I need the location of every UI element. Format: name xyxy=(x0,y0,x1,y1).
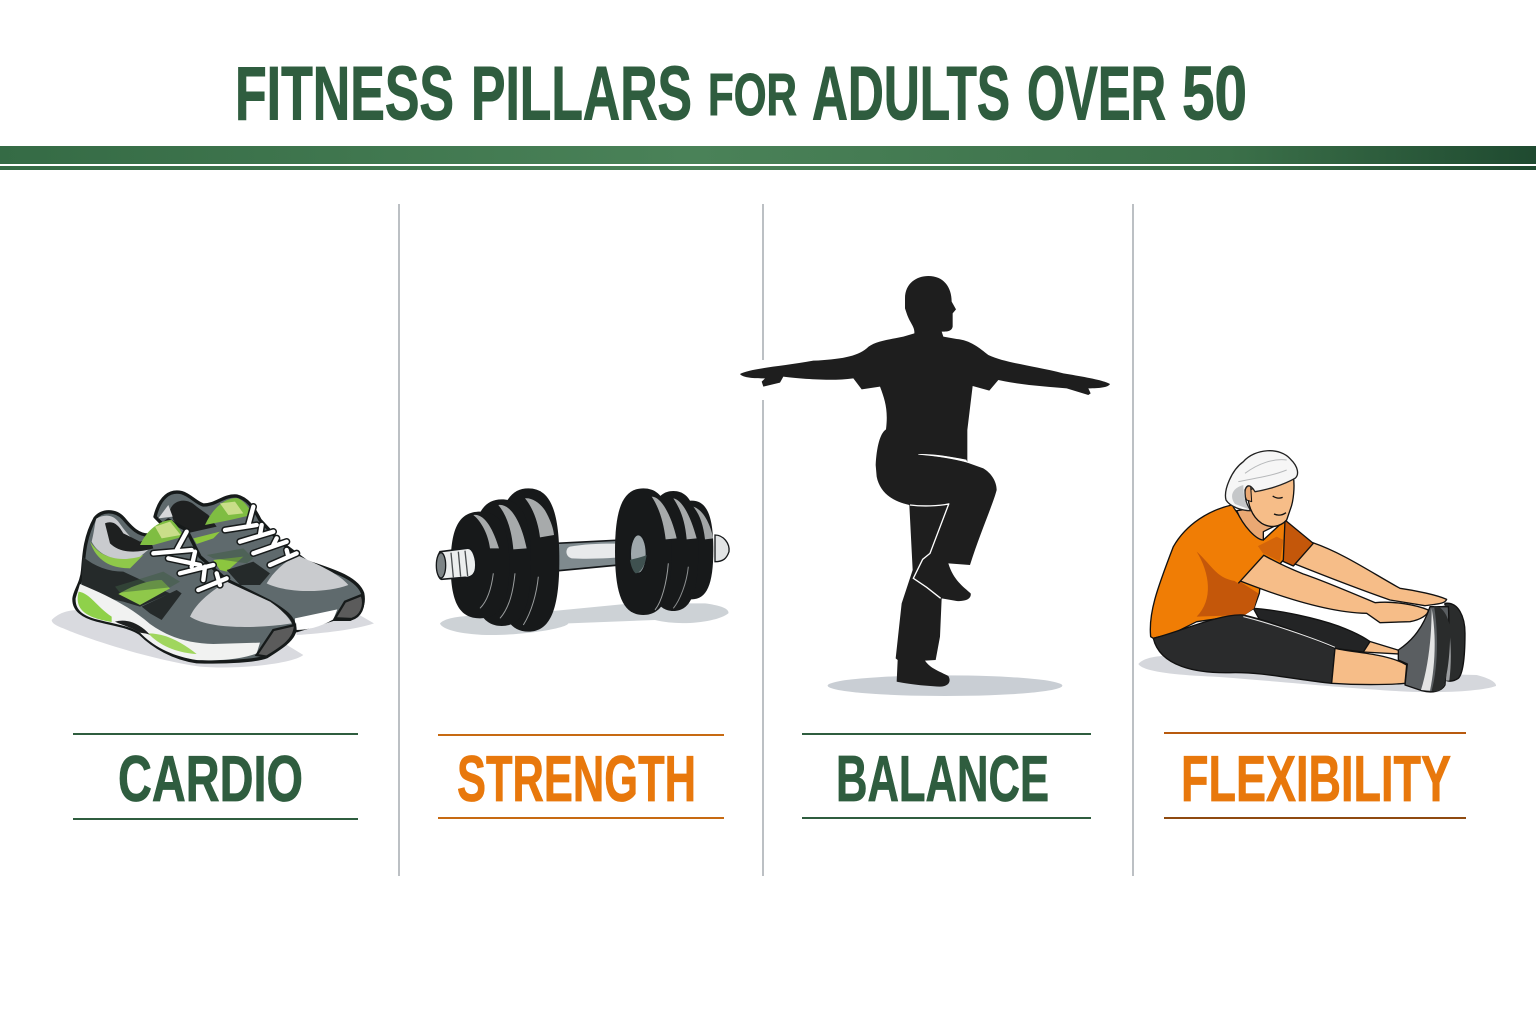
back shoe xyxy=(155,492,363,631)
near sleeve xyxy=(1210,505,1264,583)
title: PILLARS xyxy=(471,52,692,136)
far arm xyxy=(1295,543,1447,606)
column dividers xyxy=(398,204,1134,876)
header bar xyxy=(0,146,1536,170)
hair xyxy=(1225,451,1298,511)
near thigh xyxy=(1153,615,1335,683)
front shoe xyxy=(74,512,295,662)
icon: running shoes xyxy=(52,492,374,668)
icon: dumbbell xyxy=(436,488,729,635)
left plates xyxy=(497,488,559,632)
right bar end xyxy=(715,535,729,562)
bar handle xyxy=(557,539,637,571)
title: 50 xyxy=(1182,52,1247,136)
label: cardio: CARDIO xyxy=(118,742,303,815)
neck xyxy=(1237,507,1277,540)
far sleeve xyxy=(1270,520,1313,566)
title: FOR xyxy=(708,62,797,128)
title xyxy=(235,52,1247,136)
ear xyxy=(1245,486,1252,502)
far lower leg xyxy=(1363,641,1400,654)
label: strength: STRENGTH xyxy=(457,742,696,815)
icon: balance silhouette xyxy=(740,276,1110,696)
front shoe laces xyxy=(153,532,227,590)
back shoe laces xyxy=(225,507,297,565)
right collar xyxy=(630,535,646,573)
icon: woman stretching xyxy=(1138,451,1496,692)
label: balance: BALANCE xyxy=(836,742,1049,815)
far shoe xyxy=(1442,603,1465,681)
title: FITNESS xyxy=(235,52,454,136)
face xyxy=(1248,477,1294,526)
title: ADULTS xyxy=(812,52,1010,136)
near arm xyxy=(1239,555,1428,623)
title: OVER xyxy=(1027,52,1166,136)
near shoe xyxy=(1398,607,1449,692)
torso shirt xyxy=(1150,505,1285,638)
left bar end xyxy=(437,548,476,579)
right plates xyxy=(670,501,713,599)
far upper leg xyxy=(1253,608,1370,652)
near calf xyxy=(1332,648,1407,685)
